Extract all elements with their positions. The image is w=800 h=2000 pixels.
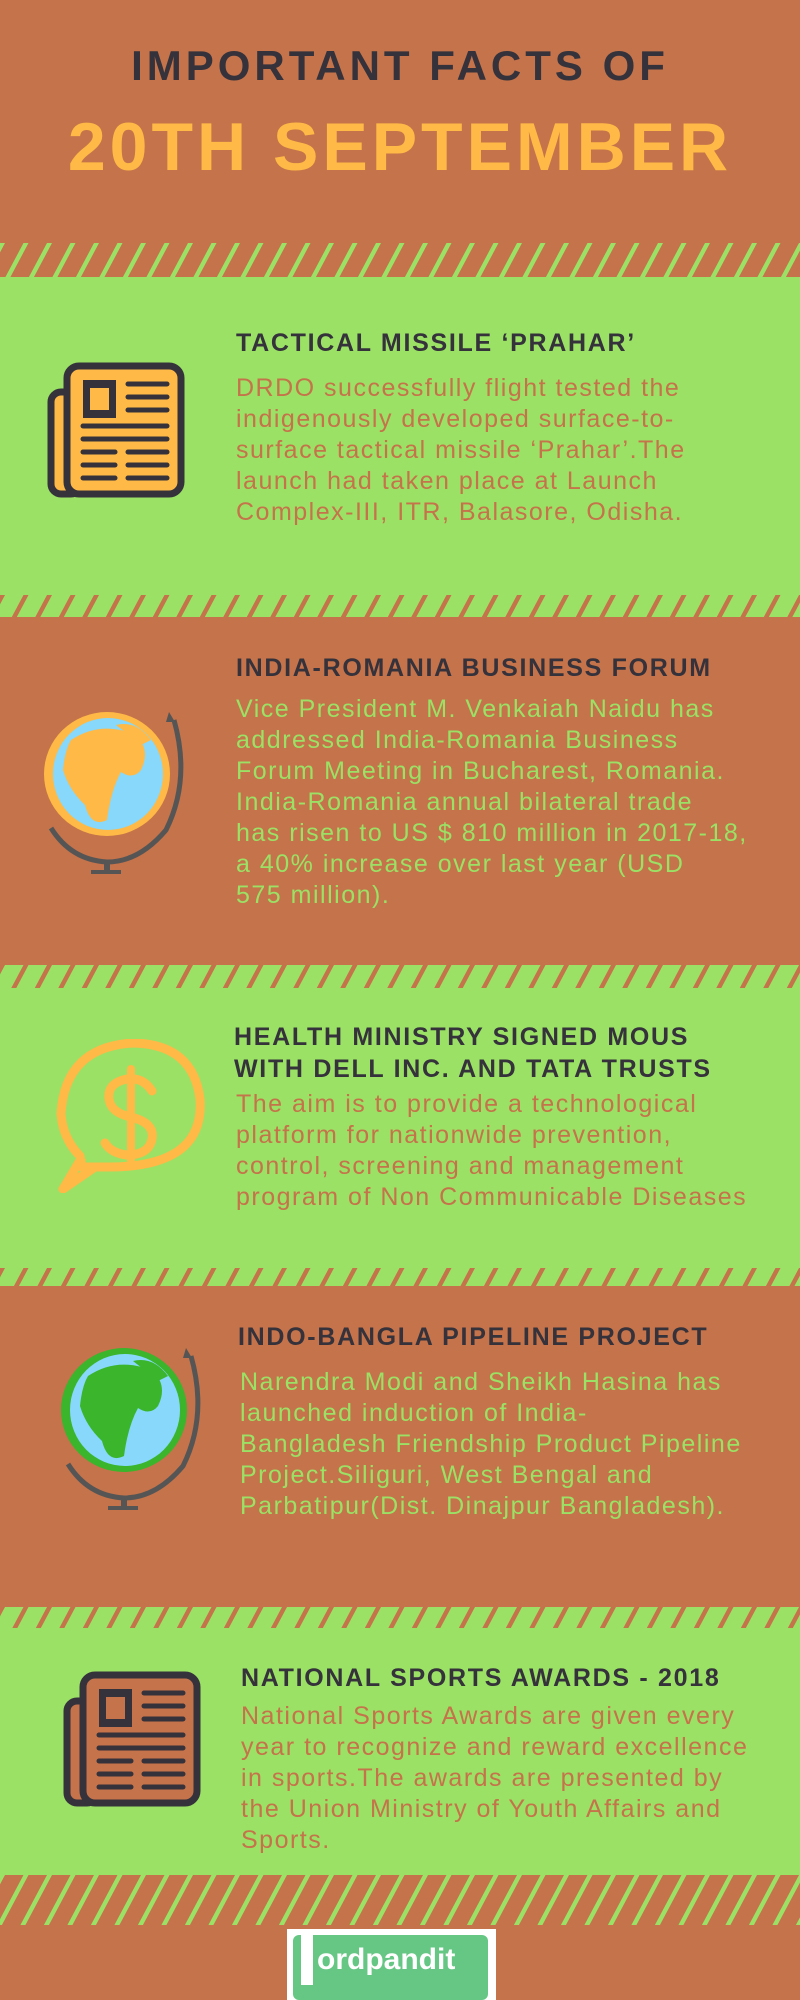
panel: health ministry: [0, 988, 800, 1268]
text: India-Romania annual bilateral trade: [236, 788, 693, 816]
title line 2: 20TH SEPTEMBER: [68, 109, 732, 185]
text: [236, 695, 748, 909]
text: [241, 1702, 748, 1854]
text: [236, 374, 686, 526]
text: Parbatipur(Dist. Dinajpur Bangladesh).: [240, 1492, 725, 1520]
header: [0, 0, 800, 243]
title line 1: IMPORTANT FACTS OF: [131, 42, 669, 89]
text: program of Non Communicable Diseases: [236, 1183, 747, 1211]
icon: globe orange: [44, 712, 184, 874]
text: The aim is to provide a technological: [236, 1090, 697, 1118]
text: Complex-III, ITR, Balasore, Odisha.: [236, 498, 683, 526]
text: has risen to US $ 810 million in 2017-18,: [236, 819, 748, 847]
text: National Sports Awards are given every: [241, 1702, 735, 1730]
text: launched induction of India-: [240, 1399, 588, 1427]
text: platform for nationwide prevention,: [236, 1121, 672, 1149]
text: launch had taken place at Launch: [236, 467, 658, 495]
text: in sports.The awards are presented by: [241, 1764, 723, 1792]
heading: WITH DELL INC. AND TATA TRUSTS: [234, 1055, 712, 1083]
panel: tactical missile: [0, 277, 800, 595]
heading: INDO-BANGLA PIPELINE PROJECT: [238, 1323, 708, 1351]
text: the Union Ministry of Youth Affairs and: [241, 1795, 722, 1823]
icon: newspaper: [48, 362, 184, 498]
panel: sports awards: [0, 1628, 800, 1875]
heading: HEALTH MINISTRY SIGNED MOUS: [234, 1023, 689, 1051]
icon: globe green: [61, 1348, 200, 1510]
logo: wordpandit: [287, 1929, 496, 2000]
text: [236, 1090, 747, 1211]
logo: wordpandit: ordpandit: [317, 1943, 455, 1976]
text: Forum Meeting in Bucharest, Romania.: [236, 757, 725, 785]
icon: newspaper brown: [64, 1672, 200, 1806]
panel: indo-bangla: [0, 1286, 800, 1607]
heading: INDIA-ROMANIA BUSINESS FORUM: [236, 654, 712, 682]
text: surface tactical missile ‘Prahar’.The: [236, 436, 686, 464]
text: Vice President M. Venkaiah Naidu has: [236, 695, 715, 723]
heading: NATIONAL SPORTS AWARDS - 2018: [241, 1664, 720, 1692]
text: year to recognize and reward excellence: [241, 1733, 748, 1761]
text: Sports.: [241, 1826, 331, 1854]
text: DRDO successfully flight tested the: [236, 374, 680, 402]
text: addressed India-Romania Business: [236, 726, 679, 754]
panel: india-romania: [0, 617, 800, 967]
text: control, screening and management: [236, 1152, 684, 1180]
heading: [234, 1023, 712, 1083]
text: [240, 1368, 742, 1520]
text: indigenously developed surface-to-: [236, 405, 675, 433]
text: Narendra Modi and Sheikh Hasina has: [240, 1368, 722, 1396]
heading: TACTICAL MISSILE ‘PRAHAR’: [236, 329, 636, 357]
text: Project.Siliguri, West Bengal and: [240, 1461, 653, 1489]
text: 575 million).: [236, 881, 390, 909]
text: Bangladesh Friendship Product Pipeline: [240, 1430, 742, 1458]
icon: dollar bubble: [56, 1039, 205, 1193]
text: a 40% increase over last year (USD: [236, 850, 684, 878]
